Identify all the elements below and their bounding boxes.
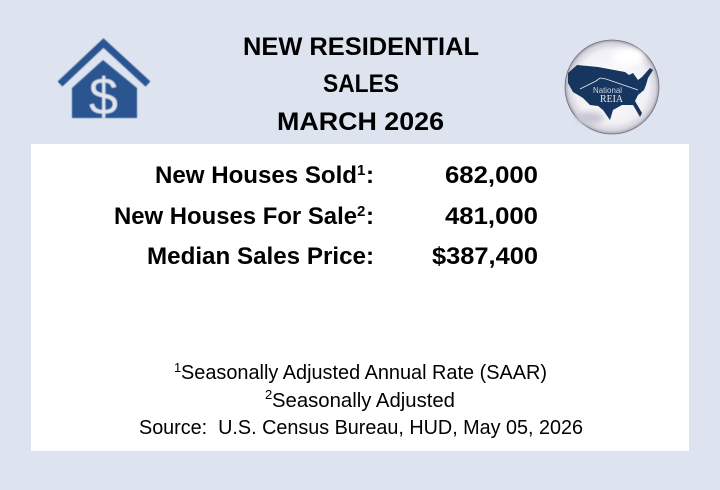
white content panel [31, 144, 689, 451]
icon: house with dollar sign: $ [89, 68, 118, 126]
statistic: median sales price: Median Sales Price: [147, 243, 374, 270]
footnotes and source: 2 [265, 387, 272, 402]
statistic: median sales price [147, 243, 538, 270]
title: MARCH 2026 [277, 108, 444, 136]
icon: National REIA globe logo [565, 40, 659, 134]
statistic: new houses for sale: 481,000 [445, 203, 538, 230]
title: SALES [323, 70, 399, 98]
roof line [580, 78, 638, 90]
statistic: new houses for sale: 2 [357, 203, 365, 220]
footnotes and source: Seasonally Adjusted Annual Rate (SAAR) [181, 362, 547, 384]
statistic: new houses for sale: : [366, 203, 374, 230]
title: NEW RESIDENTIAL [243, 33, 479, 61]
statistic: new houses for sale [114, 203, 538, 230]
footnotes and source [139, 360, 583, 439]
footnotes and source: Source: U.S. Census Bureau, HUD, May 05, 2026 [139, 417, 583, 439]
icon: house with dollar sign [60, 43, 148, 126]
footnotes and source: Seasonally Adjusted [272, 390, 455, 412]
statistic: new houses sold: : [366, 162, 374, 189]
statistic: new houses sold: 1 [357, 162, 365, 179]
statistic: new houses sold: New Houses Sold [155, 162, 357, 189]
statistic: new houses sold [155, 162, 538, 189]
logo text [593, 85, 623, 105]
footnotes and source: 1 [174, 360, 181, 375]
statistic: median sales price: $387,400 [432, 243, 538, 270]
map of the USA [568, 65, 653, 120]
logo text: REIA [600, 93, 623, 105]
title [243, 33, 479, 136]
statistic: new houses for sale: New Houses For Sale [114, 203, 357, 230]
statistic: new houses sold: 682,000 [445, 162, 538, 189]
logo text: National [593, 85, 622, 95]
